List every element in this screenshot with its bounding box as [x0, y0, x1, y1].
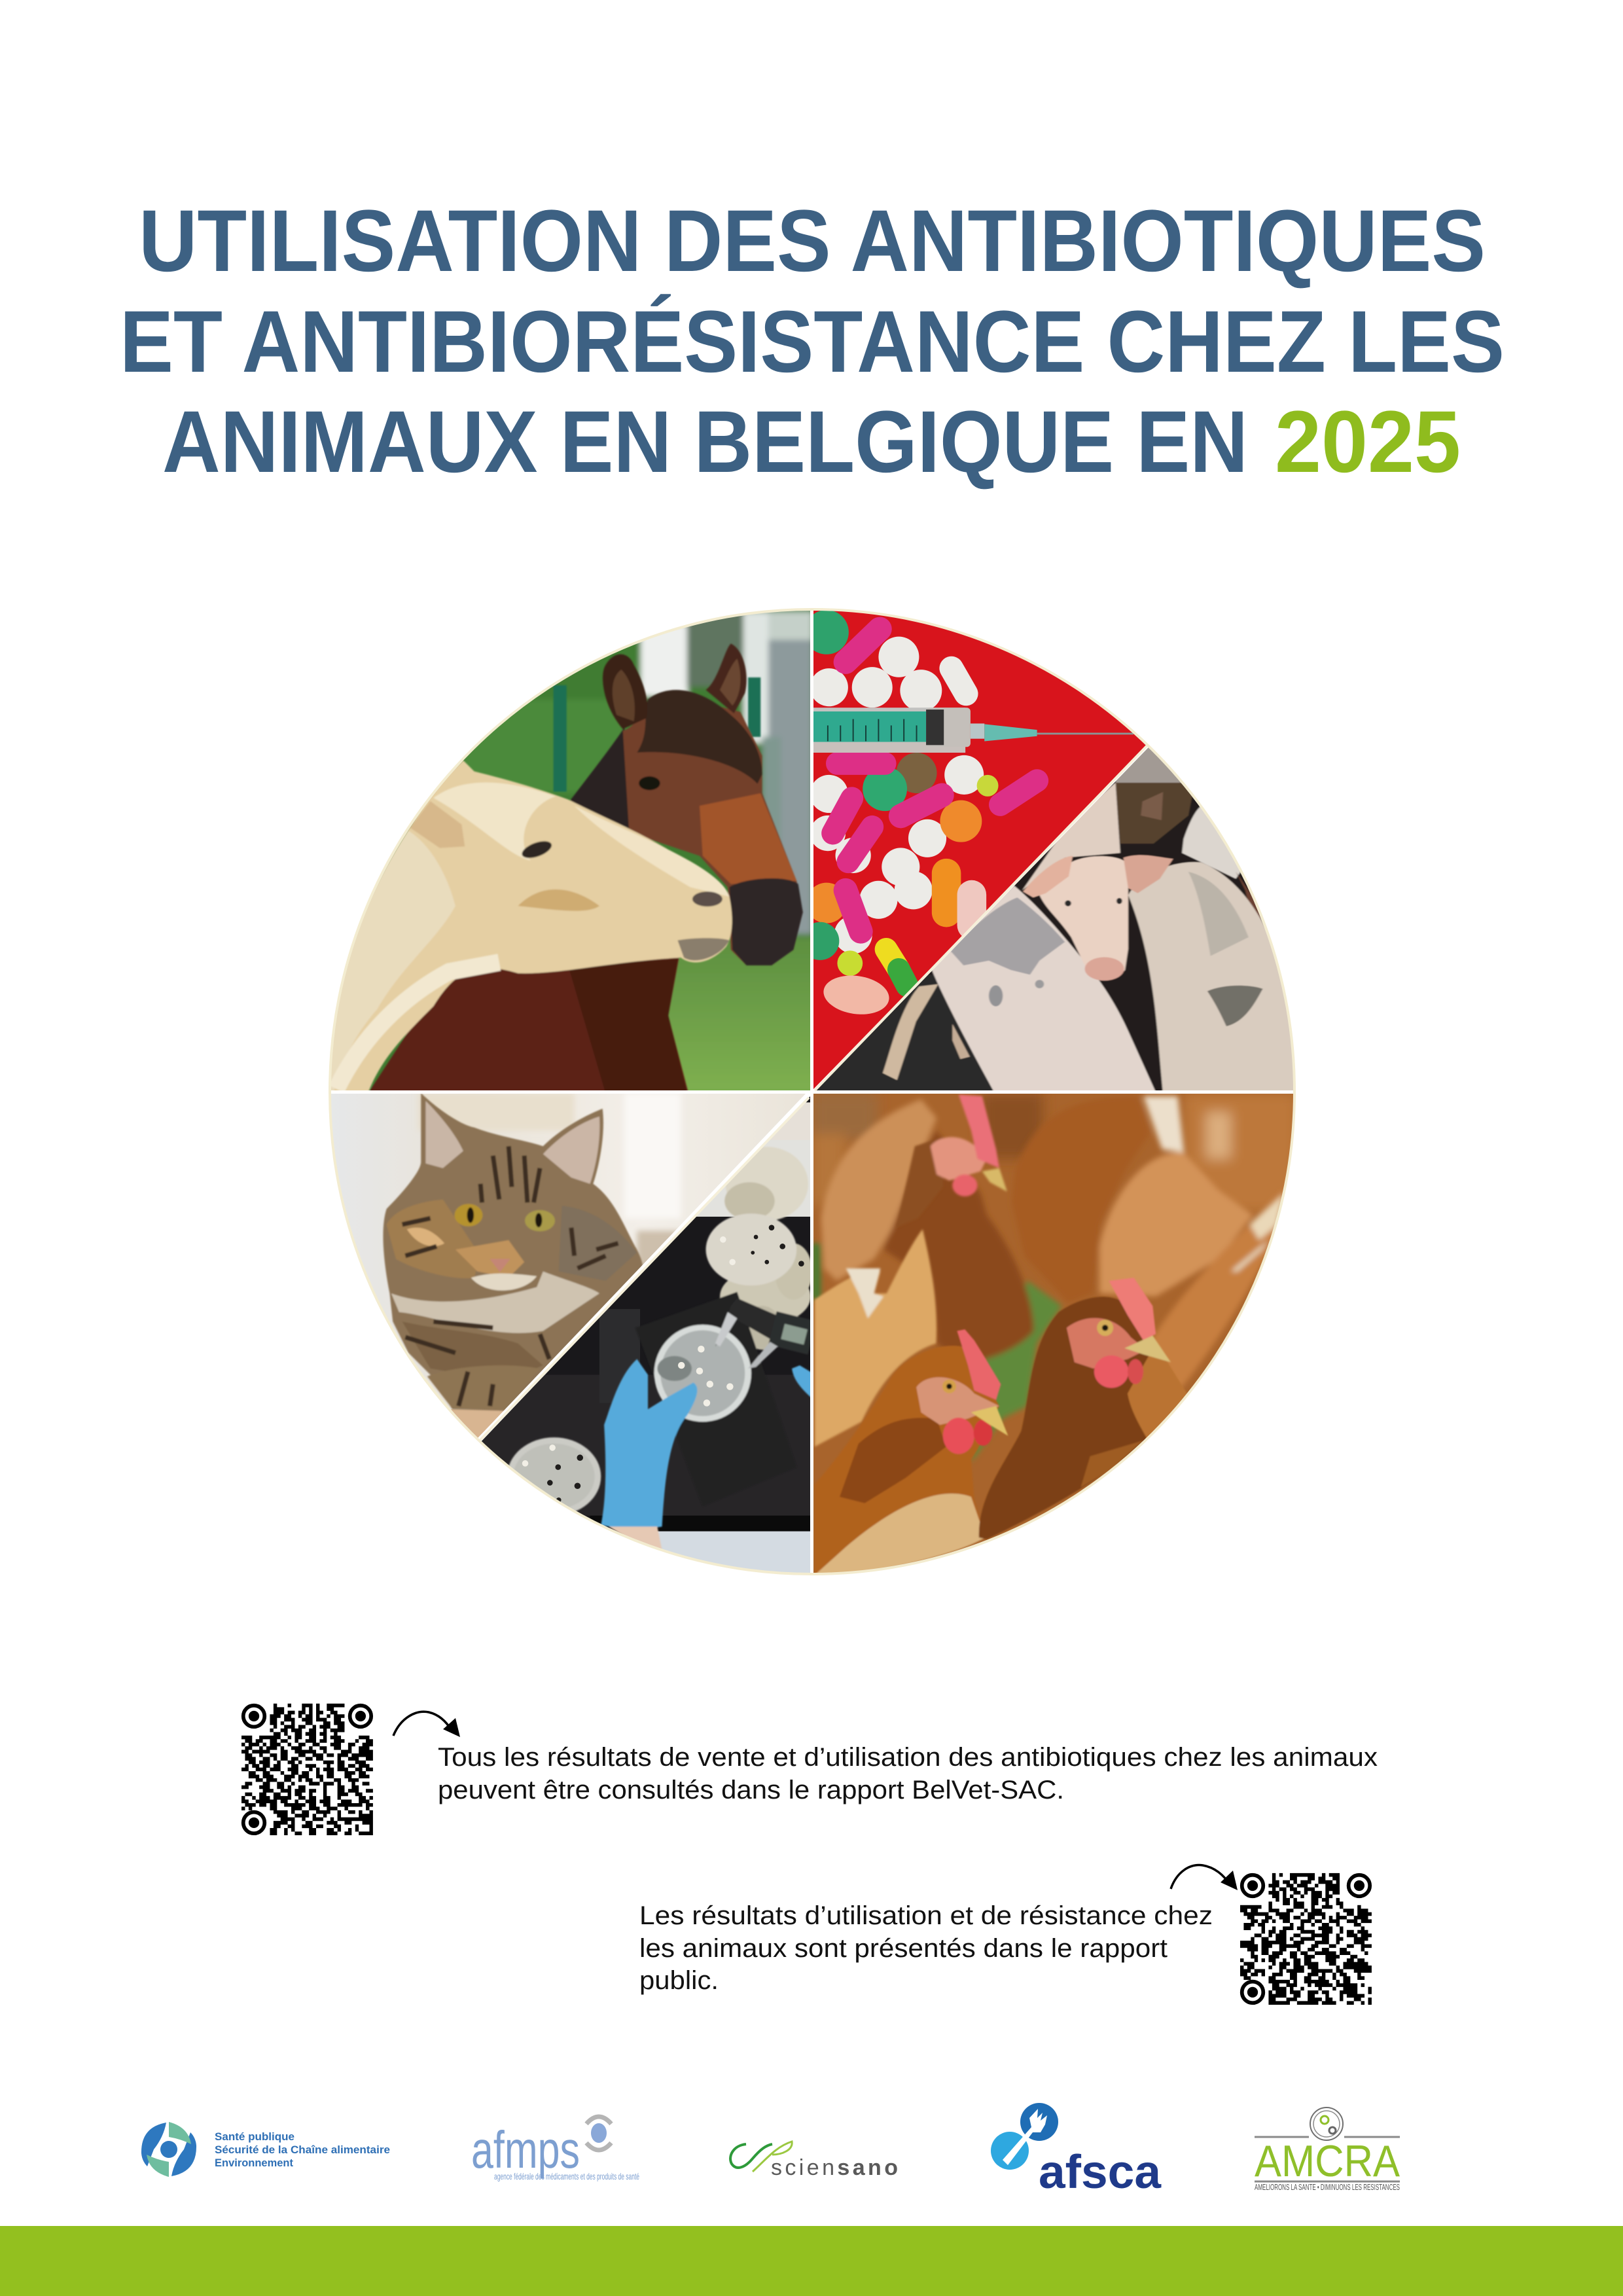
brown horse face [623, 693, 803, 965]
QR finder patterns [1242, 1875, 1370, 2003]
text: public report: les animaux sont présentés dans le rapport [639, 1934, 1168, 1963]
title: UTILISATION DES ANTIBIOTIQUES [139, 192, 1486, 290]
QR code: public report [1240, 1875, 1372, 2003]
photo: horses [317, 599, 821, 1100]
logo: sciensano: sciensano [771, 2155, 898, 2180]
wheel rim [330, 609, 1294, 1574]
fork [1003, 2109, 1047, 2165]
title: ET ANTIBIORÉSISTANCE CHEZ LES [120, 293, 1505, 391]
faces [916, 1377, 999, 1425]
logo: SPF Santé publique: Sécurité de la Chaîne alimentaire [215, 2144, 390, 2156]
emblem [141, 2122, 196, 2177]
logo: afsca [991, 2103, 1162, 2198]
logo: SPF Santé publique [141, 2122, 390, 2177]
logo: sciensano [730, 2142, 898, 2180]
text: BelVet-SAC report [438, 1743, 1378, 1804]
ears [603, 655, 647, 729]
footer bar [0, 2226, 1623, 2296]
wheel dividers [480, 745, 1147, 1440]
petri dish [1310, 2108, 1343, 2140]
photo: pills and syringe [813, 611, 1146, 1089]
title [120, 192, 1505, 491]
title: ANIMAUX EN BELGIQUE EN [162, 393, 1248, 491]
legs [883, 984, 938, 1080]
brown horse neck mane [569, 728, 632, 834]
logo: afsca: afsca [1039, 2146, 1162, 2198]
logo: afmps: afmps [471, 2121, 580, 2179]
text: public report: Les résultats d’utilisation et de résistance chez [639, 1901, 1213, 1930]
text: BelVet-SAC report: Tous les résultats de vente et d’utilisation des antibiotiques chez les animaux [438, 1743, 1378, 1772]
wattles [943, 1418, 974, 1454]
pig head [1039, 856, 1128, 978]
logo: SPF Santé publique: Santé publique [215, 2130, 294, 2143]
left pig [932, 886, 1156, 1094]
text: public report: public. [639, 1966, 719, 1995]
logo: AMCRA: AMCRA [1255, 2136, 1400, 2186]
logo: AMCRA: AMELIORONS LA SANTE • DIMINUONS LES RESISTANCES [1255, 2182, 1400, 2192]
text: public report [639, 1901, 1213, 1995]
brown horse body [368, 956, 688, 1094]
QR modules [241, 1706, 373, 1833]
beaks [971, 1406, 1008, 1436]
logo: SPF Santé publique: Environnement [215, 2157, 293, 2169]
text: BelVet-SAC report: peuvent être consultés dans le rapport BelVet-SAC. [438, 1776, 1064, 1804]
arrow: towards first QR code [393, 1712, 460, 1737]
front left hen [815, 1346, 999, 1575]
photo: cat [331, 1094, 806, 1438]
photo: hens [808, 1090, 1309, 1590]
eyes [942, 1380, 956, 1393]
forelock [637, 690, 762, 784]
caliper [715, 1299, 777, 1346]
right pig [1128, 862, 1299, 1094]
QR code: BelVet-SAC report [241, 1706, 373, 1833]
QR modules [1240, 1875, 1372, 2003]
palomino horse [329, 761, 732, 1094]
photo: laboratory [474, 1093, 816, 1575]
combs [957, 1329, 1001, 1400]
title: 2025 [1275, 393, 1461, 491]
front right hen [979, 1297, 1156, 1539]
photo wheel [317, 589, 1321, 1590]
arrow: towards second QR code [1171, 1865, 1238, 1890]
logo: afmps: agence fédérale des médicaments et des produits de santé [494, 2171, 639, 2181]
logo: AMCRA [1255, 2108, 1400, 2192]
QR finder patterns [243, 1706, 371, 1833]
pale pig behind [1022, 783, 1120, 890]
photo: pigs [817, 747, 1293, 1090]
gloves [601, 1359, 697, 1529]
leaf [730, 2142, 792, 2172]
